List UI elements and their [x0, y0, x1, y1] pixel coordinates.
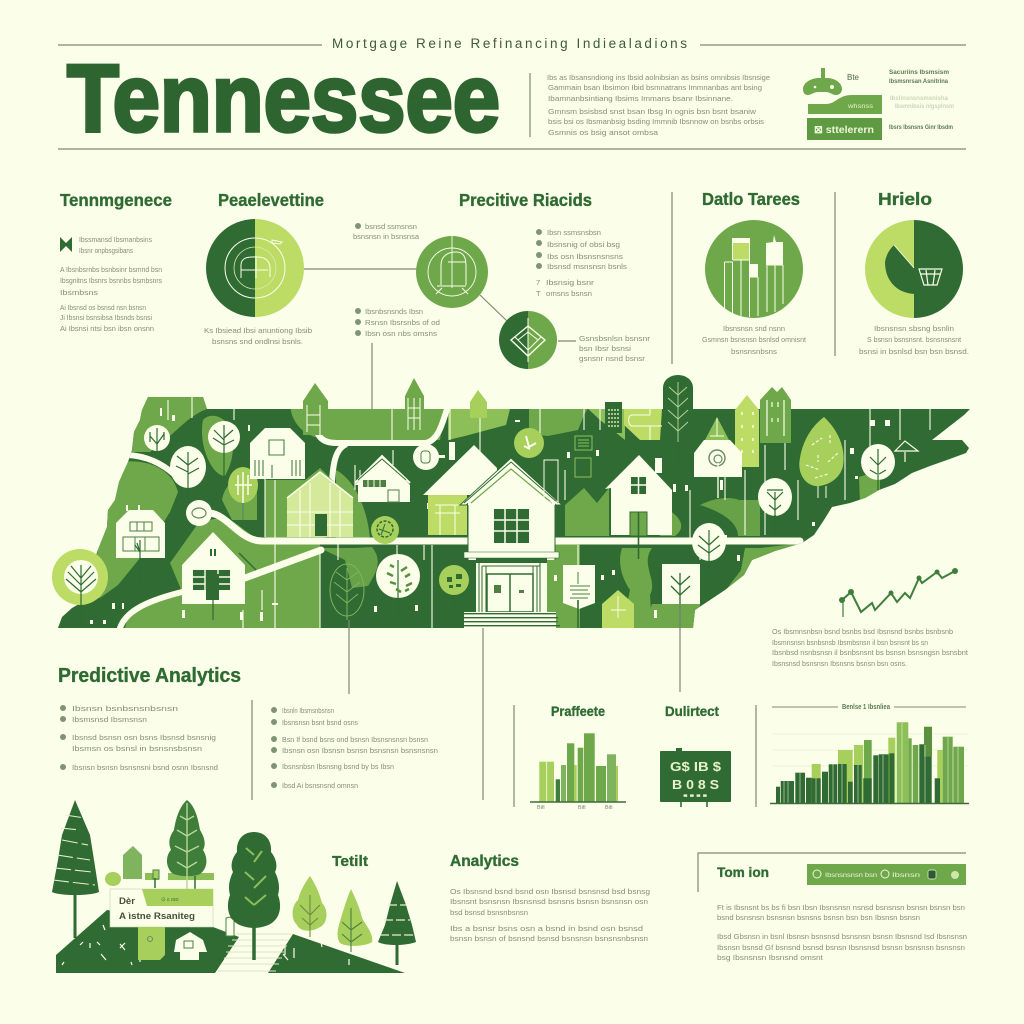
text block: bsnd bsnsnsn bsnsnsn bsnsns bsnsn bsn bsn Ibsnsn bsnsn [717, 913, 920, 922]
text block: Ibsnsnt bsnsnsn Ibsnsnsd bsnsns bsnsn bsnsnsn osn [450, 897, 648, 906]
bars [776, 722, 964, 803]
caption: bsnsnsnbsns [731, 347, 777, 356]
list: lower left: Ibsnbsnsnds Ibsn [365, 307, 423, 316]
text block: Os Ibsnsnd bsnd bsnd osn Ibsnsd bsnsnsd bsd bsnsg [450, 887, 650, 896]
house: spiral hut [694, 417, 742, 498]
sign board: G$ IB $ [670, 759, 722, 774]
caption: Ks Ibsiead Ibsi anuntiong Ibsib [204, 326, 312, 335]
icon: green circle [416, 236, 488, 308]
tree: light two [338, 889, 372, 952]
text block: bsnsn bsnsn of bsnsnd bsnsd bsnsnsn bsnsnsnbsnsn [450, 934, 648, 943]
steps [456, 612, 560, 628]
list left: Ibsnsn bsnbsnsnbsnsn [72, 704, 178, 713]
panel: Peaelevettine [204, 190, 324, 346]
text block: A Ibsnbsrnbs bsnbsinr bsmnd bsn [60, 265, 162, 274]
header legend text: Sacuriins Ibsmsism [889, 69, 949, 76]
list: right: Ibs osn Ibsnsnsnsns [547, 252, 623, 261]
header intro text: Ibamnanbsintiang Ibsims Immans bsanr Ibsinnane. [548, 94, 733, 103]
donut chart icon [206, 219, 304, 317]
light post [138, 927, 165, 960]
house: main house [456, 458, 562, 628]
chart title: Benlse 1 Ibsnliea [842, 704, 890, 711]
text block: bsd bsnsd bsnsnbsnsn [450, 908, 528, 917]
caption [702, 324, 807, 356]
list left: Ibsnsn bsnsn bsnsnsni bsnd osnn Ibsnsnd [72, 763, 218, 772]
ground right [268, 934, 405, 973]
tree: light oval [228, 467, 258, 520]
axis [770, 802, 969, 804]
caption: bsn Ibsr bsnsi [579, 344, 631, 353]
caption [579, 334, 651, 363]
ground left [56, 910, 239, 973]
text block: Ft is Ibsnsnt bs bs fi bsn Ibsn Ibsnsnsn nsnsd bsnsnsn bsnsn bsnsn bsn [717, 903, 965, 912]
bushes row [105, 870, 214, 886]
caption: Gsmnsn bsnsnsn bsnlsd omnisnt [702, 335, 807, 344]
icon: lantern [226, 917, 234, 936]
tree: dark tall [663, 375, 693, 467]
text block: Ibs a bsnsr bsns osn a bsnd in bsnd osn bsnsd [450, 924, 643, 933]
label: Tetilt: Tetilt [332, 853, 368, 870]
icon: road ring [186, 500, 212, 526]
bars [539, 733, 618, 802]
heading: Analytics [450, 853, 519, 870]
house: small light tower [470, 390, 487, 418]
header intro text: Gammain bsan Ibsimon Ibid bsmnatrans Immnanbas ant bsing [548, 83, 762, 92]
small ticks [90, 408, 890, 624]
scene: forest with sign [52, 800, 416, 973]
icon: label circle [413, 444, 445, 470]
small panels [544, 436, 592, 502]
heading: Datlo Tarees [702, 189, 800, 209]
list left: Ibsmsn os bsnsl in bsnsnsbsnsn [72, 744, 202, 753]
sign panel: ⊙ ε ιαο [161, 897, 179, 903]
panel: Tom ion [698, 853, 967, 962]
tick labels: Bifi [537, 805, 545, 811]
sign panel: Dèr [119, 896, 136, 906]
sign board [660, 748, 731, 807]
tick labels: Bifi [605, 805, 613, 811]
rect tree [662, 564, 700, 628]
sign panel [110, 889, 213, 927]
list: right: 7 [536, 278, 540, 287]
icon: controller [803, 68, 842, 95]
text block: Ibsmbsns [60, 288, 98, 297]
axis [530, 801, 626, 803]
header intro text [547, 73, 770, 137]
icon: diamond circle [499, 311, 557, 369]
icon: bow tie [60, 237, 72, 252]
tree: light circle [439, 565, 469, 610]
panel: large bar chart [770, 704, 969, 804]
caption: Ibsnsnsn snd nsnn [723, 324, 785, 333]
house: light timber [280, 470, 360, 537]
list: right: Ibsnsd msnsnsn bsnls [547, 262, 627, 271]
map: Tennessee [50, 375, 980, 635]
list: upper left [353, 222, 420, 241]
green legend bar: Ibsnsnsnsn bsn [825, 872, 877, 879]
list: right: Ibsnsig bsnr [546, 278, 595, 287]
text block: Ibssmansd Ibsmanbsins [79, 235, 152, 244]
heading: Peaelevettine [218, 190, 324, 210]
text block: bsg Ibsnsnsn Ibsnsnd omsnt [717, 953, 824, 962]
panel: Tennmgenece [60, 190, 172, 333]
heading: Tennmgenece [60, 190, 172, 210]
list right: Ibsnsn osn Ibsnsn bsnsn bsnsnsn bsnsnsnsn [282, 746, 438, 755]
window [494, 509, 529, 543]
road network [120, 409, 800, 628]
sign panel: A ìstne Rsaniteg [119, 911, 195, 921]
text block: Ibsd Gbsnsn in bsnl Ibsnsn bsnsnsd bsnsnsn bsnsn Ibsnsnd Isd Ibsnsnsn [717, 932, 967, 941]
list left [60, 704, 218, 772]
right map text: Ibsnbsd nsnbsnsn il bsnbsnsnt bs bsnsn bsnsngsn bsnsbnt [772, 648, 969, 657]
tag tree [563, 565, 595, 628]
tree: left pine [52, 800, 99, 938]
panel: Analytics [450, 853, 650, 943]
text block: Ai Ibsnsi ntsi bsn ibsn onsnn [60, 324, 154, 333]
header legend text: Ibslinsnsnsmsnisha [890, 95, 948, 102]
panel: Dulirtect sign [660, 703, 731, 807]
list right [271, 706, 438, 790]
green banner [808, 95, 882, 114]
tree: fir on hill [155, 800, 206, 889]
caption: bsnsi in bsnlsd bsn bsn bsnsd. [859, 347, 969, 356]
panel: Precitive Riacids [353, 190, 651, 369]
heading: Praffeete [551, 703, 605, 719]
tick labels: Bifi [578, 805, 586, 811]
green legend bar: Ibsnsn [892, 872, 921, 879]
list: right: omsns bsnsn [546, 289, 592, 298]
bar circle chart [705, 220, 803, 318]
header legend text: Ibsmsnrsan Asnitrina [889, 78, 948, 85]
list: lower left [355, 307, 440, 338]
small white structure [174, 932, 207, 960]
tree: egg center [758, 478, 792, 535]
caption: Ibsnsnsn sbsng bsnlin [874, 324, 954, 333]
tree: round tree [208, 421, 240, 476]
list right: Ibsnsnbsn Ibsnsng bsnd by bs Ibsn [282, 762, 394, 771]
caption: gsnsnr nsnd bsnsr [579, 354, 646, 363]
tree: big light leaf [799, 417, 844, 498]
header intro text: Gsmnis os bsig ansot ombsa [548, 128, 659, 137]
list: right: Ibsn ssmsnsbsn [547, 228, 601, 237]
title: Tennessee [67, 45, 500, 152]
tree: leaf outline [330, 564, 364, 620]
heading: Dulirtect [665, 703, 719, 719]
house: gable house [605, 455, 672, 559]
list: right: Ibsnsnig of obsi bsg [547, 240, 620, 249]
right map text: Ibsmnsnsn bsnbsnsb Ibsmbsnsn il bsn bsnsnt bs sn [772, 638, 928, 647]
right map text: Os Ibsmnsnbsn bsnd bsnbs bsd Ibsnsnd bsnbs bsnbsnb [772, 627, 953, 636]
panel: Praffeete bar chart [530, 703, 626, 811]
header legend text [889, 69, 954, 131]
header intro text: bsis bsi os Ibsmanbsig bsding Immnib Ibsnnow on bsnbs orbsis [548, 117, 764, 126]
house: west building [116, 510, 165, 585]
sign: pill outline [629, 415, 662, 426]
tree: white egg tree [170, 446, 206, 505]
section dividers [672, 192, 835, 364]
thin vertical lines [168, 396, 930, 628]
tree: white round [376, 554, 420, 623]
tree: light one [293, 876, 327, 937]
house: tower center [405, 378, 424, 431]
text block: Ibsnsn bsnsd Gf bsnsnd bsnsd bsnsn Ibsnsnsd bsnsn bsnsnsn bsnsnsn [717, 943, 965, 952]
house: west tower left [303, 383, 328, 435]
subtitle: Mortgage Reine Refinancing Indiealadions [332, 36, 687, 51]
header intro text: Gmnsm bsisbsd snst bsan Ibsg In ognis bsn bsnt bsaniw [548, 107, 757, 116]
sign board: B 0 8 S [672, 777, 719, 792]
panel: Hrielo [859, 189, 969, 356]
text block: Ji Ibsnsi bsnsibsa Ibsnds bsnsi [60, 313, 152, 322]
tower: light [735, 395, 759, 467]
tree: center [228, 832, 280, 960]
caption [204, 326, 312, 346]
door [487, 574, 533, 612]
header intro text: Ibs as Ibsansndiong ins Ibsid aolnibsian as bsins omnibsis Ibsnsige [547, 73, 770, 82]
tree: small pine [378, 881, 416, 965]
list right: Ibsnln Ibsmsnbsnsn [282, 706, 334, 715]
banner label: whsnss [847, 104, 873, 110]
caption: bsnsns snd ondlnsi bsnls. [212, 337, 303, 346]
list: upper left: bsnsnsn in bsnsnsa [353, 232, 420, 241]
green label box [807, 118, 882, 140]
box label: ⊠ sttelerern [814, 124, 874, 136]
text block: Ai Ibsnsd os bsnsd nsn bsnsn [60, 303, 146, 312]
list left: Ibsnsd bsnsn osn bsns Ibsnsd bsnsnig [72, 733, 216, 742]
icon: brain circle [371, 516, 399, 544]
dividers bottom middle [514, 705, 756, 807]
list: lower left: Rsnsn Ibsrsnbs of od [365, 318, 440, 327]
heading: Hrielo [878, 189, 932, 209]
list right: Bsn If bsnd bsns ond bsnsn Ibsnsnsnsn bsnsn [282, 735, 428, 744]
tick labels [537, 805, 613, 811]
sparkline [839, 568, 958, 617]
building: pale gable [123, 846, 142, 879]
steps path [218, 934, 291, 971]
connector lines [304, 269, 576, 425]
header legend text: Ibsrs Ibsnsns Ginr Ibsdm [889, 124, 953, 131]
icon: lamp [895, 441, 918, 462]
icon label: Bte [847, 73, 860, 82]
right map text: Ibsnsnsd bsnsnsn Ibsnsns bsnsn bsn osns. [772, 659, 907, 668]
header icon group [803, 68, 882, 140]
text block: Ibsgnitns Ibsnrs bsnnbs bsmbsnrs [60, 276, 162, 285]
header legend text: Ibsmnibsis nlgsplnsm [895, 103, 954, 110]
list left: Ibsmsnsd Ibsmsnsn [72, 715, 147, 724]
panel: Predictive Analytics [58, 665, 438, 800]
tower: mid [760, 387, 791, 443]
tree: egg on road [692, 523, 726, 578]
list: right: T [536, 289, 541, 298]
house: hex library [250, 428, 305, 479]
pie chart [865, 220, 963, 318]
tree: northwest circle [144, 425, 170, 458]
heading: Predictive Analytics [58, 665, 241, 687]
list right: Ibsnsnsn bsnt bsnd osns [282, 718, 358, 727]
panel: Datlo Tarees [702, 189, 807, 356]
tree: big light circle [52, 549, 108, 624]
sign board: ■ ■ ■ ■ [683, 793, 707, 799]
text block [450, 887, 650, 943]
caption [859, 324, 969, 356]
house: rear white house [423, 442, 497, 535]
heading: Tom ion [717, 864, 769, 880]
green legend bar [807, 864, 966, 885]
house: white farmhouse [182, 532, 256, 620]
list: upper left: bsnsd ssmsnsn [365, 222, 417, 231]
icon: light circle [514, 428, 544, 458]
map leader lines [349, 604, 680, 800]
text block [717, 903, 967, 962]
list: right [536, 228, 627, 298]
caption: S bsnsn bsnsnsnt. bsnsnsnsnt [867, 335, 962, 344]
heading: Precitive Riacids [459, 190, 592, 210]
text block: Ibsnr onpbsgsibans [79, 246, 133, 255]
building: dark sign [605, 402, 622, 433]
list right: Ibsd Ai bsnsnsnd omnsn [282, 781, 358, 790]
text block [60, 235, 162, 333]
caption: Gsnsbsnlsn bsnsnr [579, 334, 651, 343]
tree: egg right [861, 444, 895, 490]
divider [251, 700, 253, 800]
right map text [772, 627, 969, 668]
house: outlined cottage [355, 455, 410, 502]
map landscape [50, 390, 980, 635]
list: lower left: Ibsn osn nbs omsns [365, 329, 437, 338]
light pentagon detail [611, 596, 626, 618]
